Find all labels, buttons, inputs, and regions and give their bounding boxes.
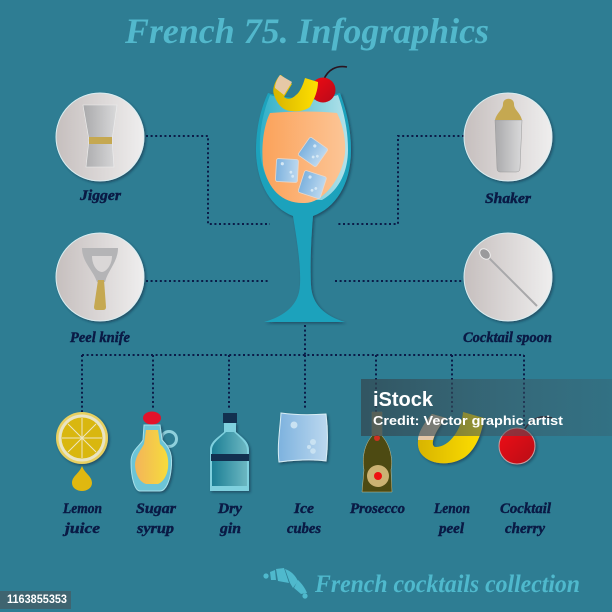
cherry [310, 78, 336, 102]
footer text: French cocktails collection [314, 571, 580, 598]
label: Cocktail spoon [463, 330, 552, 346]
tool: cocktail spoon [464, 233, 552, 321]
glass body and stem [256, 93, 351, 322]
label: cubes [287, 521, 321, 537]
ingredient: lemon juice [56, 412, 108, 491]
ingredient: ice cubes [278, 413, 328, 462]
connector lines [82, 136, 524, 430]
label [287, 501, 321, 537]
label: Ice [293, 501, 314, 517]
drink [262, 112, 345, 203]
label: Shaker [485, 191, 531, 207]
watermark band: iStock [373, 389, 434, 411]
label: Jigger [79, 188, 121, 204]
label: Prosecco [350, 501, 405, 517]
watermark band: Credit: Vector graphic artist [373, 413, 564, 428]
cherry stem [324, 67, 347, 79]
label: juice [63, 521, 100, 537]
tool: peel knife [56, 233, 144, 321]
label: Lenon [433, 501, 470, 517]
label [500, 501, 552, 537]
image id badge [0, 591, 71, 609]
ingredient: sugar syrup [131, 412, 176, 491]
ice cube 3 [298, 170, 327, 199]
label: cherry [505, 521, 545, 537]
label [433, 501, 470, 537]
label: peel [437, 521, 465, 537]
tool: jigger [56, 93, 144, 181]
ingredient: lemon peel [418, 412, 484, 463]
icon: croissant [263, 568, 308, 599]
tool: shaker [464, 93, 552, 181]
image id badge: 1163855353 [7, 594, 67, 606]
label: Dry [217, 501, 242, 517]
label: gin [219, 521, 241, 537]
label [217, 501, 242, 537]
label: syrup [136, 521, 175, 537]
glass upper highlight [260, 95, 348, 200]
ingredient: dry gin [210, 413, 249, 491]
ice cube 2 [298, 137, 328, 167]
label: Lemon [62, 501, 102, 517]
ingredient: prosecco [362, 412, 392, 492]
watermark band [361, 379, 612, 436]
label: Cocktail [500, 501, 552, 517]
ice cube 1 [275, 158, 299, 183]
title: French 75. Infographics [124, 11, 489, 51]
lemon peel garnish [273, 75, 318, 111]
ingredient: cocktail cherry [499, 417, 552, 464]
label [62, 501, 102, 537]
cocktail glass [256, 67, 351, 322]
label [136, 501, 176, 537]
label: Peel knife [70, 330, 130, 346]
label: Sugar [136, 501, 176, 517]
